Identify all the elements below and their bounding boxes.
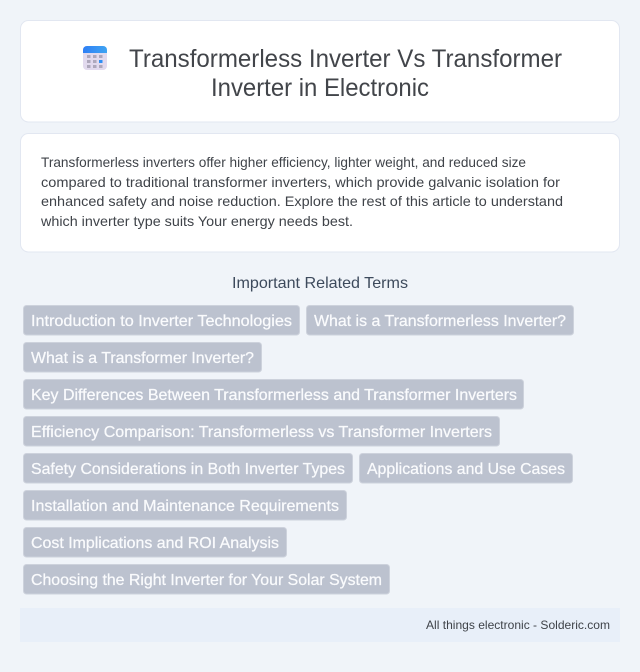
footer [20, 608, 620, 642]
tag: key differences: Key Differences Between Transformerless and Transformer Inverters [31, 387, 517, 404]
tag: applications [360, 454, 572, 483]
tag: transformer: What is a Transformer Inverter? [31, 350, 254, 367]
icon: calendar [83, 46, 107, 70]
tag: transformer [24, 342, 262, 372]
tag list [24, 306, 574, 594]
text block: summary: compared to traditional transformer inverters, which provide galvanic isolation for [41, 174, 560, 190]
tag: efficiency: Efficiency Comparison: Transformerless vs Transformer Inverters [31, 424, 492, 441]
heading: related terms: Important Related Terms [232, 275, 408, 292]
tag: efficiency [24, 416, 500, 446]
tag: choosing: Choosing the Right Inverter for Your Solar System [31, 572, 382, 589]
tag: cost [24, 528, 286, 557]
tag: safety: Safety Considerations in Both Inverter Types [31, 461, 345, 478]
title: Inverter in Electronic [211, 74, 429, 102]
panel: summary card [20, 134, 620, 252]
title: Transformerless Inverter Vs Transformer [129, 45, 562, 73]
tag: choosing [24, 564, 390, 594]
tag: installation [24, 490, 346, 520]
text block: summary: which inverter type suits Your energy needs best. [40, 213, 353, 229]
tag: key differences [24, 380, 524, 409]
tag: safety [24, 454, 352, 483]
tag: transformerless: What is a Transformerless Inverter? [314, 313, 566, 330]
text block: summary [40, 154, 563, 229]
tag: transformerless [306, 306, 574, 335]
tag: introduction [24, 306, 300, 335]
tag: applications: Applications and Use Cases [367, 461, 565, 478]
panel: title card [20, 20, 620, 122]
footer: All things electronic - Solderic.com [426, 618, 610, 632]
tag: introduction: Introduction to Inverter Technologies [31, 313, 292, 330]
text block: summary: Transformerless inverters offer higher efficiency, lighter weight, and reduced size [41, 154, 526, 170]
tag: installation: Installation and Maintenance Requirements [31, 498, 339, 515]
title [129, 45, 562, 102]
tag: cost: Cost Implications and ROI Analysis [31, 535, 279, 552]
text block: summary: enhanced safety and noise reduction. Explore the rest of this article to understand [41, 193, 563, 209]
